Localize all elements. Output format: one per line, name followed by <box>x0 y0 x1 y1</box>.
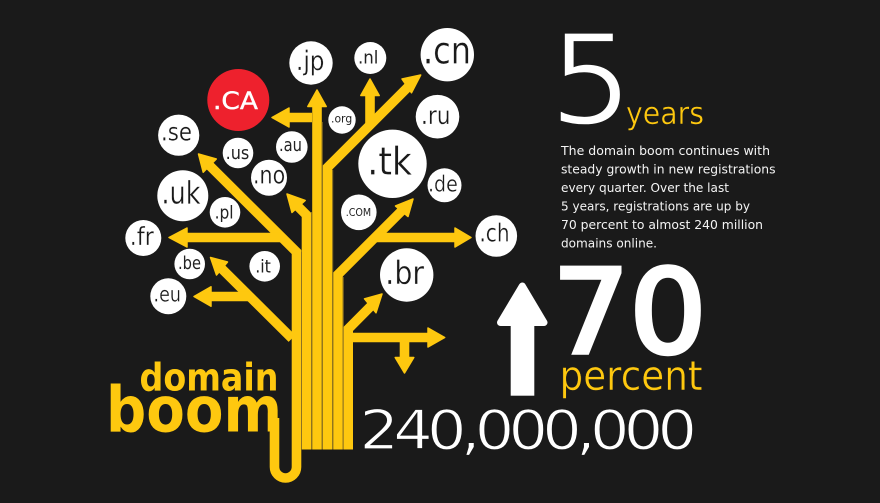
circle .br <box>380 248 433 302</box>
circle .it: .it <box>255 257 271 278</box>
label: years: years <box>626 96 704 132</box>
circle .nl: .nl <box>358 47 378 68</box>
circle .se <box>158 115 199 156</box>
circle .pl <box>210 197 240 228</box>
circle .COM: .COM <box>346 206 371 219</box>
circle .uk: .uk <box>161 175 201 211</box>
body paragraph: The domain boom continues with <box>560 143 770 158</box>
circle .pl: .pl <box>215 202 234 223</box>
circle .no <box>251 160 287 196</box>
circle .be: .be <box>178 253 201 274</box>
circle .ru: .ru <box>421 101 450 130</box>
circle .ch <box>476 215 517 257</box>
trunk strand: .no arrow <box>287 194 306 450</box>
circle .org <box>328 106 356 134</box>
circle .tk: .tk <box>367 139 412 183</box>
circle .jp <box>289 41 333 85</box>
circle .tk <box>358 130 427 198</box>
circle .au <box>276 131 308 163</box>
circle .fr <box>125 220 161 256</box>
circle .fr: .fr <box>130 222 154 251</box>
circle .se: .se <box>161 118 192 147</box>
trunk strand with loop and left branches <box>169 154 296 478</box>
body paragraph: steady growth in new registrations <box>561 161 776 176</box>
circle .cn: .cn <box>423 29 471 72</box>
circle .de: .de <box>428 172 458 198</box>
body paragraph: 5 years, registrations are up by <box>561 198 751 214</box>
circle .ch: .ch <box>479 219 510 248</box>
logo title: domain boom: boom <box>106 374 282 447</box>
circle .au: .au <box>279 135 302 156</box>
trunk separators <box>302 122 343 450</box>
circle .it <box>249 251 280 282</box>
circle .CA (highlighted red) <box>207 69 269 131</box>
body paragraph: 70 percent to almost 240 million <box>561 217 763 232</box>
circle .us <box>223 138 253 168</box>
logo title: domain boom: domain <box>140 356 278 400</box>
big number: 240,000,000: 240,000,000 <box>360 399 694 462</box>
big number: 5: 5 <box>549 7 633 154</box>
big number: 70: 70 <box>552 246 706 380</box>
circle .br: .br <box>385 254 425 292</box>
tree: branching yellow arrows <box>169 75 471 478</box>
trunk strand: .cn and .nl arrows <box>328 75 421 450</box>
icon: white up arrow <box>500 286 544 396</box>
body paragraph: domains online. <box>561 236 657 250</box>
circle .uk <box>157 170 208 221</box>
circle .eu <box>150 278 186 314</box>
trunk strand: .br and unlabelled arrows <box>348 294 445 450</box>
circle .CA (highlighted red): .CA <box>213 87 258 115</box>
circle .ru <box>416 95 459 138</box>
circle .COM <box>341 194 377 230</box>
trunk strand: .tk and .ch arrows <box>338 199 471 450</box>
circle .no: .no <box>253 160 285 189</box>
trunk strand: .jp and .CA arrows <box>272 90 326 450</box>
circle .org: .org <box>331 112 352 126</box>
circle .be <box>174 249 205 279</box>
circle .us: .us <box>226 143 249 164</box>
label: percent: percent <box>560 352 702 400</box>
body paragraph: every quarter. Over the last <box>561 180 729 195</box>
circle .nl <box>354 42 386 74</box>
body paragraph <box>560 143 776 250</box>
circle .eu: .eu <box>154 283 181 307</box>
circle .jp: .jp <box>296 46 324 77</box>
